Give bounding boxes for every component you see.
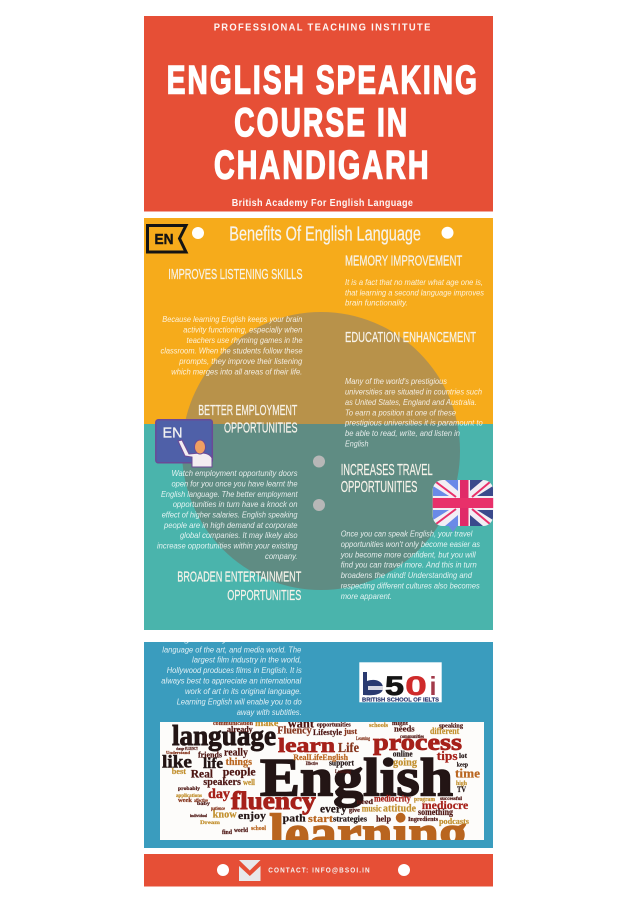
- logo: BSOI: [359, 662, 442, 703]
- word cloud: podcasts: [439, 816, 470, 826]
- icon: EN ribbon: EN: [154, 231, 174, 248]
- block: education enhancement: English: [345, 440, 369, 449]
- logo: BSOI: BRITISH SCHOOL OF IELTS: [362, 697, 439, 703]
- word cloud: online: [393, 750, 413, 759]
- word cloud: communication: [213, 721, 254, 727]
- word cloud: already: [227, 724, 253, 734]
- icon: envelope: [239, 860, 260, 881]
- word cloud: life: [203, 756, 223, 772]
- word cloud: Effective: [306, 761, 318, 767]
- word cloud: path: [283, 813, 306, 825]
- block: better employment opportunities: English language. The better employment: [161, 490, 298, 499]
- word cloud: fluency: [231, 788, 316, 815]
- main title: ENGLISH SPEAKING: [167, 58, 479, 102]
- logo: BSOI: 5: [385, 671, 404, 701]
- panel: benefits background: [144, 218, 493, 630]
- contact text: CONTACT: INFO@BSOI.IN: [268, 868, 371, 875]
- word cloud: English: [260, 748, 453, 808]
- panel: blue lower section: [144, 642, 493, 848]
- word cloud: RealLifeEnglish: [293, 753, 349, 762]
- word cloud: Real: [191, 767, 214, 781]
- word cloud: applications: [176, 794, 202, 799]
- word cloud: Understand: [166, 750, 191, 755]
- word cloud: just: [343, 727, 357, 736]
- word cloud: tips: [437, 748, 458, 763]
- entertainment text: always best to appreciate an international: [161, 676, 301, 686]
- word cloud: strategies: [333, 815, 367, 824]
- heading: broaden entertainment opportunities: BROADEN ENTERTAINMENT: [177, 569, 301, 586]
- word cloud: speaking: [439, 723, 464, 730]
- word cloud: process: [373, 730, 462, 756]
- word cloud: Learning: [335, 769, 351, 775]
- block: increases travel opportunities: broadens the mind! Understanding and: [341, 571, 472, 580]
- word cloud: learn: [278, 735, 335, 757]
- footer dots: [217, 864, 410, 876]
- logo: BSOI: i: [430, 671, 436, 701]
- block: improves listening skills: prompts, they improve their listening: [178, 357, 303, 366]
- word cloud: high: [456, 780, 467, 787]
- block: better employment opportunities: effect of higher salaries. English speaking: [162, 510, 298, 520]
- block: memory improvement: It is a fact that no matter what age one is,: [345, 278, 483, 287]
- block: education enhancement: be able to read, write, and listen in: [345, 429, 460, 438]
- block: memory improvement: brain functionality.: [345, 298, 408, 308]
- word cloud: like: [162, 752, 192, 772]
- word cloud: baby: [197, 801, 210, 807]
- word cloud: Ingredients: [408, 817, 439, 823]
- word cloud: time: [455, 766, 480, 781]
- section heading: benefits: Benefits Of English Language: [229, 224, 421, 246]
- block: education enhancement: [344, 329, 483, 449]
- word cloud: going: [393, 758, 417, 769]
- block: memory improvement: [345, 253, 484, 308]
- word cloud: lot: [459, 751, 467, 760]
- block: education enhancement: To earn a position at one of these: [345, 408, 456, 418]
- word cloud: help: [376, 815, 392, 824]
- word cloud: start: [308, 813, 333, 825]
- block: improves listening skills: classroom. When the students follow these: [160, 346, 303, 356]
- block: education enhancement: Many of the world's prestigious: [345, 377, 447, 386]
- word cloud: [160, 722, 484, 840]
- word cloud: well: [243, 777, 256, 787]
- infographic: [144, 16, 494, 886]
- heading: broaden entertainment opportunities: OPPORTUNITIES: [227, 587, 301, 604]
- block: increases travel opportunities: INCREASES TRAVEL: [341, 462, 433, 479]
- word cloud: really: [224, 747, 248, 759]
- logo: BSOI: 0: [405, 671, 427, 701]
- block: improves listening skills: activity functioning, especially when: [183, 326, 303, 334]
- word cloud: opportunities: [317, 723, 351, 729]
- block: better employment opportunities: BETTER EMPLOYMENT: [198, 402, 297, 419]
- word cloud: keep: [457, 762, 468, 769]
- block: better employment opportunities: people are in high demand at corporate: [163, 521, 298, 530]
- block: increases travel opportunities: Once you can speak English, your travel: [341, 530, 473, 539]
- word cloud: want: [288, 716, 315, 731]
- block: education enhancement: as United States, England and Australia.: [345, 398, 477, 407]
- panel: header: [144, 16, 493, 212]
- word cloud: speakers: [203, 777, 241, 788]
- word cloud: change FLUENCY: [176, 746, 198, 751]
- word cloud: best: [172, 766, 186, 776]
- word cloud: attitude: [383, 804, 416, 815]
- icon: EN teacher board: [156, 420, 212, 467]
- word cloud: support: [329, 758, 354, 768]
- word cloud: TV: [457, 785, 466, 794]
- word cloud: needs: [394, 724, 415, 734]
- icon: EN teacher board: EN: [162, 424, 182, 442]
- word cloud: school: [251, 826, 266, 832]
- word cloud: day: [208, 787, 230, 802]
- block: increases travel opportunities: OPPORTUNITIES: [341, 479, 417, 496]
- block: better employment opportunities: opportunities in turn have a knock on: [173, 500, 298, 509]
- block: better employment opportunities: open for you once you have learnt the: [172, 480, 298, 488]
- block: improves listening skills: Because learning English keeps your brain: [162, 315, 303, 324]
- word cloud: give: [349, 808, 360, 814]
- block: better employment opportunities: company.: [265, 552, 298, 561]
- block: better employment opportunities: [157, 402, 298, 561]
- word cloud: Learning: [356, 737, 370, 742]
- main title: CHANDIGARH: [214, 144, 431, 188]
- word cloud: mediocrity: [374, 794, 411, 804]
- main title: [167, 58, 479, 188]
- word cloud: enjoy: [238, 810, 267, 822]
- block: improves listening skills: teachers use rhyming games in the: [186, 336, 303, 345]
- word cloud: things: [226, 757, 252, 768]
- word cloud: find: [222, 829, 232, 836]
- word cloud: different: [430, 726, 459, 736]
- heading: broaden entertainment opportunities: [177, 569, 301, 604]
- block: better employment opportunities: Watch employment opportunity doors: [172, 469, 298, 478]
- block: memory improvement: that learning a second language improves: [345, 288, 484, 298]
- block: better employment opportunities: increase opportunities within your existing: [157, 542, 298, 550]
- block: increases travel opportunities: respecting different cultures also becomes: [341, 582, 480, 590]
- panel: contact footer: [144, 854, 493, 886]
- block: better employment opportunities: global companies. It may likely also: [180, 531, 298, 540]
- block: increases travel opportunities: opportunities won't only become easier as: [341, 540, 480, 549]
- entertainment text: largest film industry in the world,: [192, 656, 302, 665]
- word cloud: Lifestyle: [313, 728, 342, 737]
- institute name: PROFESSIONAL TEACHING INSTITUTE: [214, 22, 432, 34]
- main title: COURSE IN: [234, 101, 409, 145]
- block: education enhancement: prestigious universities it is paramount to: [344, 419, 483, 428]
- word cloud: music: [362, 804, 382, 814]
- word cloud: learning: [269, 804, 467, 866]
- word cloud: people: [223, 765, 256, 779]
- word cloud: probably: [178, 786, 200, 792]
- entertainment text: Learning English will enable you to do: [177, 698, 302, 706]
- block: memory improvement: MEMORY IMPROVEMENT: [345, 253, 462, 270]
- word cloud: language: [172, 721, 276, 752]
- block: improves listening skills: which merges into all areas of their life.: [171, 368, 302, 376]
- block: increases travel opportunities: you become more confident, but you will: [340, 550, 476, 559]
- word cloud: communities: [400, 734, 424, 740]
- word cloud: Life: [338, 741, 359, 756]
- word cloud: might: [392, 720, 409, 727]
- word cloud: Dream: [200, 820, 221, 826]
- block: increases travel opportunities: [340, 462, 480, 601]
- entertainment text: English is by far the dominant: [172, 635, 303, 644]
- decorative dots: [192, 227, 454, 511]
- word cloud: patience: [211, 807, 226, 812]
- block: education enhancement: universities are situated in countries such: [345, 388, 482, 396]
- word cloud: affective: [194, 798, 208, 804]
- block: improves listening skills: [160, 266, 303, 376]
- word cloud: Fluency: [277, 725, 312, 736]
- entertainment text: away with subtitles.: [237, 708, 302, 717]
- block: increases travel opportunities: more apparent.: [341, 592, 392, 601]
- word cloud: program: [414, 797, 435, 803]
- entertainment text: language of the art, and media world. The: [162, 645, 302, 654]
- word cloud: week: [178, 798, 193, 804]
- word cloud: mediocre: [422, 798, 469, 812]
- word cloud: know: [213, 810, 237, 821]
- word cloud: friends: [198, 750, 223, 760]
- icon: UK flag speech bubble: [432, 480, 494, 532]
- word cloud: schools: [369, 723, 389, 729]
- word cloud: successful: [440, 796, 462, 802]
- word cloud: make: [255, 718, 278, 728]
- entertainment text: [161, 635, 303, 717]
- block: education enhancement: EDUCATION ENHANCEMENT: [345, 329, 476, 346]
- block: better employment opportunities: OPPORTUNITIES: [224, 419, 298, 436]
- entertainment text: Hollywood produces films in English. It is: [167, 666, 302, 675]
- block: improves listening skills: IMPROVES LISTENING SKILLS: [168, 266, 302, 283]
- word cloud: need: [357, 797, 374, 806]
- word cloud: world: [234, 827, 248, 834]
- word cloud: every: [320, 801, 347, 815]
- subtitle: British Academy For English Language: [232, 198, 413, 209]
- icon: EN ribbon: [148, 226, 186, 252]
- word cloud: individual: [190, 813, 208, 818]
- entertainment text: work of art in its original language.: [185, 687, 302, 696]
- block: increases travel opportunities: find you can travel more. And this in turn: [341, 561, 477, 570]
- word cloud: something: [418, 807, 453, 817]
